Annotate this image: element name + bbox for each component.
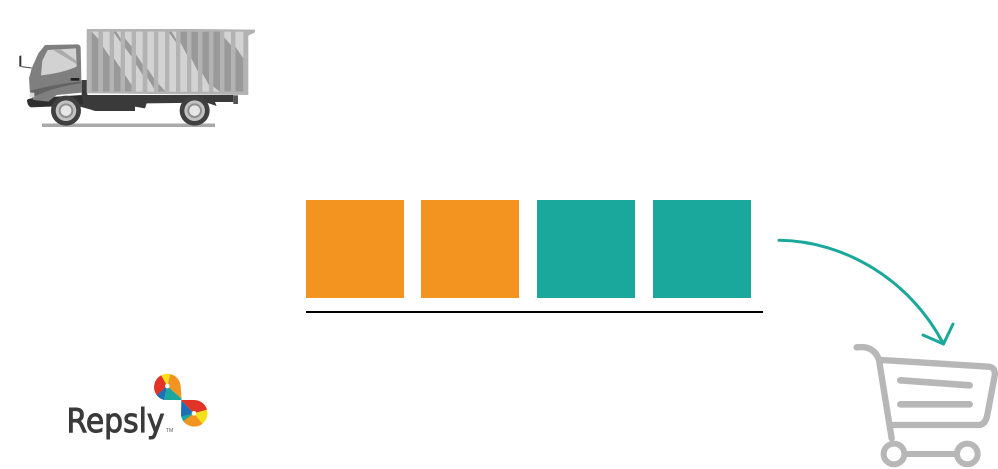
cart line 1	[900, 380, 970, 385]
baseline under squares	[306, 311, 763, 313]
icon: shopping cart	[857, 347, 995, 464]
teal square 2	[653, 200, 751, 298]
cart right wheel	[957, 444, 978, 464]
logo mark: upper loop	[154, 374, 182, 400]
cart frame	[857, 347, 995, 438]
icon: grey delivery truck	[19, 29, 255, 127]
cart left wheel	[884, 444, 904, 464]
logo mark: lower loop	[181, 400, 208, 427]
arrow: curved teal arrow to cart	[779, 240, 953, 344]
truck front wheel	[51, 96, 81, 126]
truck cab	[19, 44, 83, 107]
logo: Repsly	[66, 370, 212, 440]
logo trademark: TM	[166, 428, 173, 434]
truck ground shadow	[42, 124, 215, 127]
cart axle	[907, 445, 955, 463]
cart line 2	[900, 394, 970, 414]
truck chassis	[27, 80, 238, 111]
truck cargo box	[87, 29, 255, 95]
logo wordmark: Repsly	[66, 401, 164, 440]
truck rear wheel	[180, 96, 210, 126]
teal square 1	[537, 200, 635, 298]
orange square 2	[421, 200, 519, 298]
orange square 1	[306, 200, 404, 298]
